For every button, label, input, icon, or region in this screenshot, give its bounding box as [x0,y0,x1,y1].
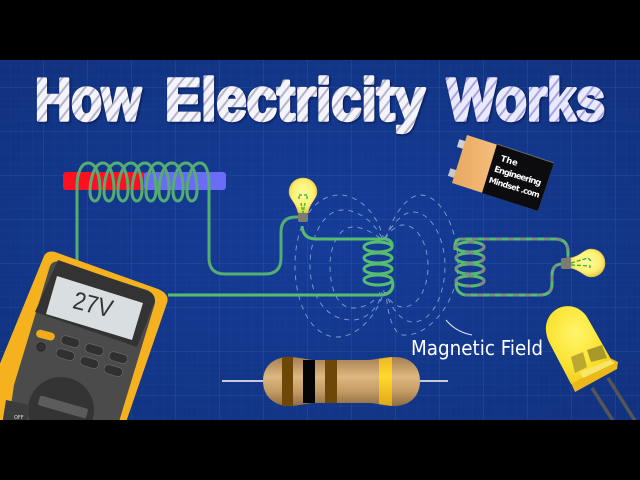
magnetic field label: Magnetic Field [411,336,543,360]
meter dial: OFF [14,415,24,421]
battery label [488,153,548,200]
battery label: The [499,154,519,169]
title: Electricity [165,67,425,133]
title [35,67,605,133]
right transformer circuit [455,239,568,295]
magnetic field lines [295,195,458,337]
icon: light bulb right [561,249,605,277]
title: How [35,67,141,133]
meter dial [2,377,94,420]
icon: LED [546,306,637,424]
title: Works [447,67,605,133]
meter screen [46,276,143,340]
left transformer circuit [168,226,393,295]
icon: resistor [222,357,448,406]
icon: multimeter [0,252,168,420]
icon: nine volt battery [448,135,554,211]
icon: light bulb top [289,178,317,222]
coil and circuit wire [77,163,303,274]
battery label: Engineering [493,165,543,189]
infographic canvas [0,60,640,420]
electromagnet bar [63,172,226,190]
blueprint background [0,60,640,420]
battery label: Mindset .com [488,176,541,200]
meter buttons [35,329,129,378]
magnetic field label [411,320,543,360]
meter reading: 27V [70,287,116,323]
